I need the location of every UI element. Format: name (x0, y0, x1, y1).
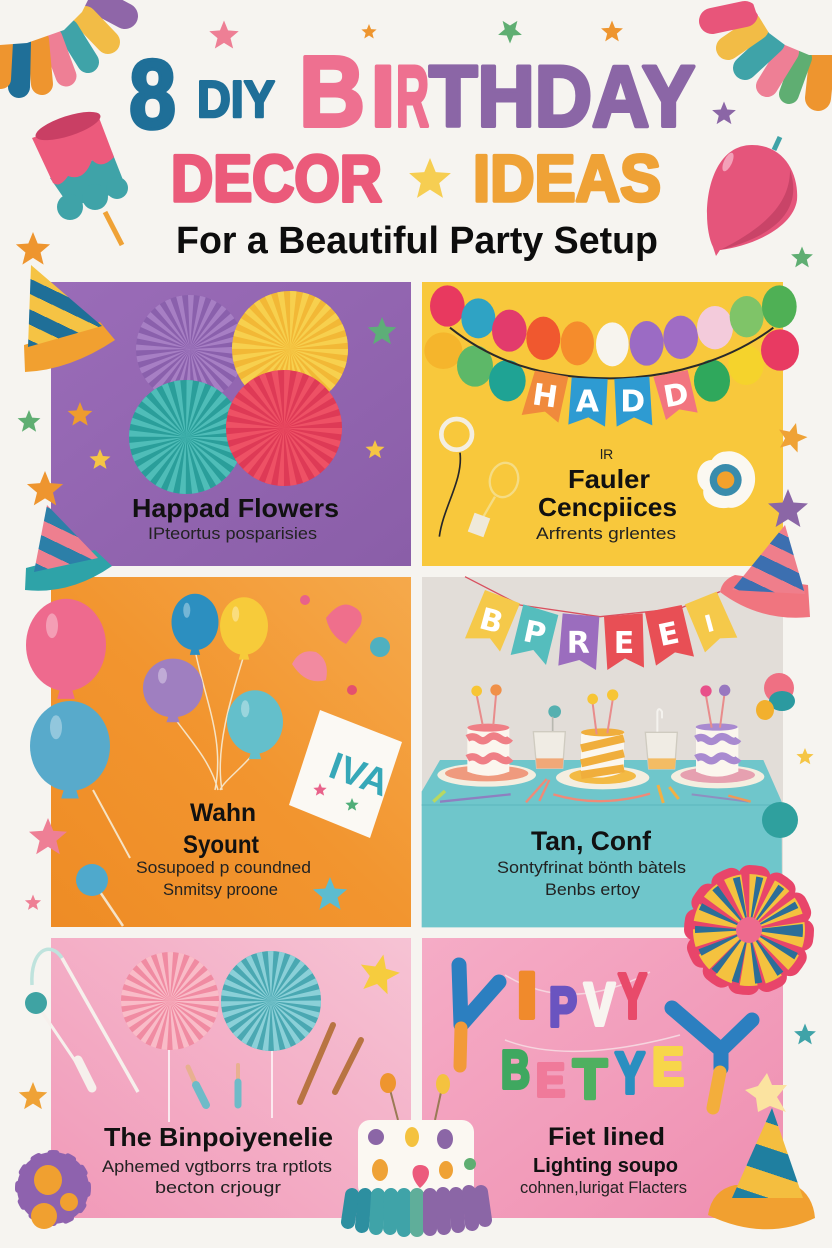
pink pinwheel (121, 952, 219, 1122)
balloon letters row two: B (501, 1040, 530, 1100)
purple paper rosette (136, 295, 244, 403)
panel caption: Arfrents grlentes (536, 524, 676, 543)
panel caption line 2: Snmitsy proone (163, 880, 278, 899)
panel caption: Sontyfrinat bönth bàtels (497, 858, 686, 877)
balloon letters row one: V (584, 971, 615, 1038)
balloon cluster (143, 594, 283, 759)
balloon letters row one: P (549, 975, 577, 1038)
panel: balloon letters (422, 938, 783, 1218)
teal pinwheel (221, 951, 321, 1118)
panel caption: IPteortus posparisies (148, 524, 317, 543)
icon: teal circle (762, 802, 798, 838)
panel heading: Tan, Conf (531, 826, 652, 856)
greeting card: IVA (324, 745, 394, 805)
balloon letters row two: Y (615, 1041, 645, 1106)
panel heading: Fauler (568, 464, 650, 494)
icon: star on yellow panel (775, 419, 810, 454)
balloon strings (173, 650, 255, 790)
table and banner art: E (614, 626, 634, 661)
panel heading: Wahn (190, 799, 256, 827)
table and banner art: R (567, 626, 590, 661)
panel caption: Sosupoed p coundned (136, 858, 311, 877)
title line 1: BIRTHDAY: B (299, 36, 365, 148)
letter strings (505, 972, 680, 1051)
panel caption line 2: Benbs ertoy (545, 880, 641, 899)
title line 1: DIY: DIY (197, 71, 275, 129)
panel heading line 2: Syount (183, 831, 260, 859)
title star (409, 158, 451, 198)
balloon letters row one: Y (618, 960, 647, 1032)
icon: purple flower (17, 1152, 89, 1229)
balloon letters row two: E (536, 1054, 565, 1106)
yellow star (356, 950, 403, 996)
icon: large rosette (694, 875, 804, 985)
balloon garland art: D (620, 384, 645, 419)
balloon garland art (424, 285, 799, 537)
panel: balloons and card (51, 577, 411, 927)
top-right paper fan (712, 0, 832, 98)
icon: party hat 1 (16, 232, 115, 372)
title line 1: BIRTHDAY: I (371, 49, 395, 145)
stars in purple panel (68, 317, 396, 469)
panel: paper flowers (51, 282, 411, 566)
icon: party hat 3 (720, 489, 810, 618)
panel caption line 2: becton crjougr (155, 1178, 281, 1197)
teal paper rosette (129, 380, 243, 494)
top stars (209, 20, 813, 267)
panel: balloon garland (422, 282, 799, 566)
balloon letters row one: I (516, 958, 538, 1032)
balloon garland art: H (530, 377, 560, 416)
confetti shapes (292, 595, 390, 695)
icon: left stars (18, 410, 816, 1109)
table and banner art (422, 577, 782, 927)
table and banner art: I (702, 609, 717, 638)
icon: pink balloon (26, 599, 106, 699)
balloon letters row two: T (573, 1047, 607, 1110)
stray glyph mark: lR (600, 446, 613, 462)
table and banner art: B (476, 602, 507, 641)
panel heading: The Binpoiyenelie (104, 1122, 333, 1152)
craft pencils (188, 1025, 361, 1105)
icon: party hat 4 (708, 1073, 815, 1229)
icon: paper popper (32, 106, 128, 245)
panel heading: Fiet lined (548, 1123, 665, 1151)
table and banner art: P (520, 614, 549, 653)
big balloon V (459, 965, 499, 1066)
greeting card (289, 710, 402, 838)
blue lollipop (76, 864, 123, 926)
panel: pinwheel fans (25, 938, 411, 1218)
icon: party hat 2 (25, 471, 112, 591)
red paper rosette (226, 370, 342, 486)
title line 1: BIRTHDAY (299, 36, 695, 148)
panel caption: cohnen,lurigat Flacters (520, 1178, 687, 1197)
balloon garland art: A (576, 384, 600, 419)
icon: confetti dots right (756, 673, 795, 720)
teal star (313, 877, 347, 910)
title line 1: BIRTHDAY: R (396, 49, 429, 145)
subtitle: For a Beautiful Party Setup (176, 220, 658, 262)
title line 2: IDEAS: IDEAS (473, 141, 661, 215)
white wand (25, 949, 138, 1092)
title line 1: BIRTHDAY: THDAY (429, 49, 695, 145)
panel caption: Aphemed vgtborrs tra rptlots (102, 1157, 332, 1176)
yellow paper rosette (232, 291, 348, 407)
panel heading: Happad Flowers (132, 493, 339, 523)
title line 2: DECOR: DECOR (171, 141, 382, 215)
panel subheading: Lighting soupo (533, 1155, 678, 1177)
icon: blue balloon on stick (30, 701, 130, 858)
icon: red balloon (707, 137, 797, 256)
balloon letters row one (516, 958, 647, 1038)
icon: birthday cake (348, 1073, 485, 1230)
top-left paper fan (0, 0, 125, 87)
icon: small star right (796, 748, 814, 764)
balloon garland art: D (661, 376, 691, 415)
title line 1: number: 8 (129, 39, 176, 149)
big balloon Y (672, 1008, 752, 1108)
panel: table setup (422, 577, 783, 927)
panel heading line 2: Cencpiices (538, 492, 677, 522)
balloon letters row two (501, 1037, 684, 1110)
balloon letters row two: E (652, 1037, 684, 1097)
table and banner art: E (655, 616, 682, 654)
